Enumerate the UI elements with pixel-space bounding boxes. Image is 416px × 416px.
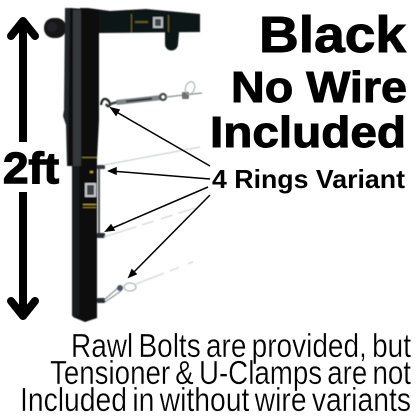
label: 4 Rings Variant: 4 Rings Variant <box>212 164 405 194</box>
wire 3 <box>104 208 195 237</box>
vertical rod <box>98 167 100 235</box>
arrow: ring 1 <box>111 108 210 166</box>
ring 2 <box>97 165 105 169</box>
label: 2ft: 2ft <box>3 144 59 193</box>
wire 4 with clamp <box>104 262 193 302</box>
post lower highlight <box>72 166 79 316</box>
height arrow: 2ft <box>3 21 59 316</box>
bracket photo <box>44 8 202 322</box>
back plate <box>63 8 72 166</box>
heading: Black: Black <box>259 6 407 63</box>
arrow: ring 4 <box>129 195 210 277</box>
wall knob <box>44 18 66 38</box>
ring 3 <box>97 233 105 238</box>
callout arrows <box>106 108 210 277</box>
lower label <box>82 157 97 208</box>
hook under arm <box>165 32 179 50</box>
arrow: ring 2 <box>109 168 210 179</box>
post highlight <box>73 10 81 166</box>
horizontal arm <box>80 8 200 33</box>
heading: No Wire: No Wire <box>231 63 407 112</box>
heading: Included: Included <box>210 108 406 157</box>
wire 2 <box>104 147 200 165</box>
arrow: up <box>11 21 35 142</box>
upper label <box>131 14 169 32</box>
arrow: down <box>11 192 35 316</box>
arrow: ring 3 <box>106 187 208 231</box>
ring 4 <box>97 298 105 303</box>
note text <box>20 327 411 416</box>
turnbuckle <box>101 80 202 106</box>
vertical post <box>68 8 99 322</box>
